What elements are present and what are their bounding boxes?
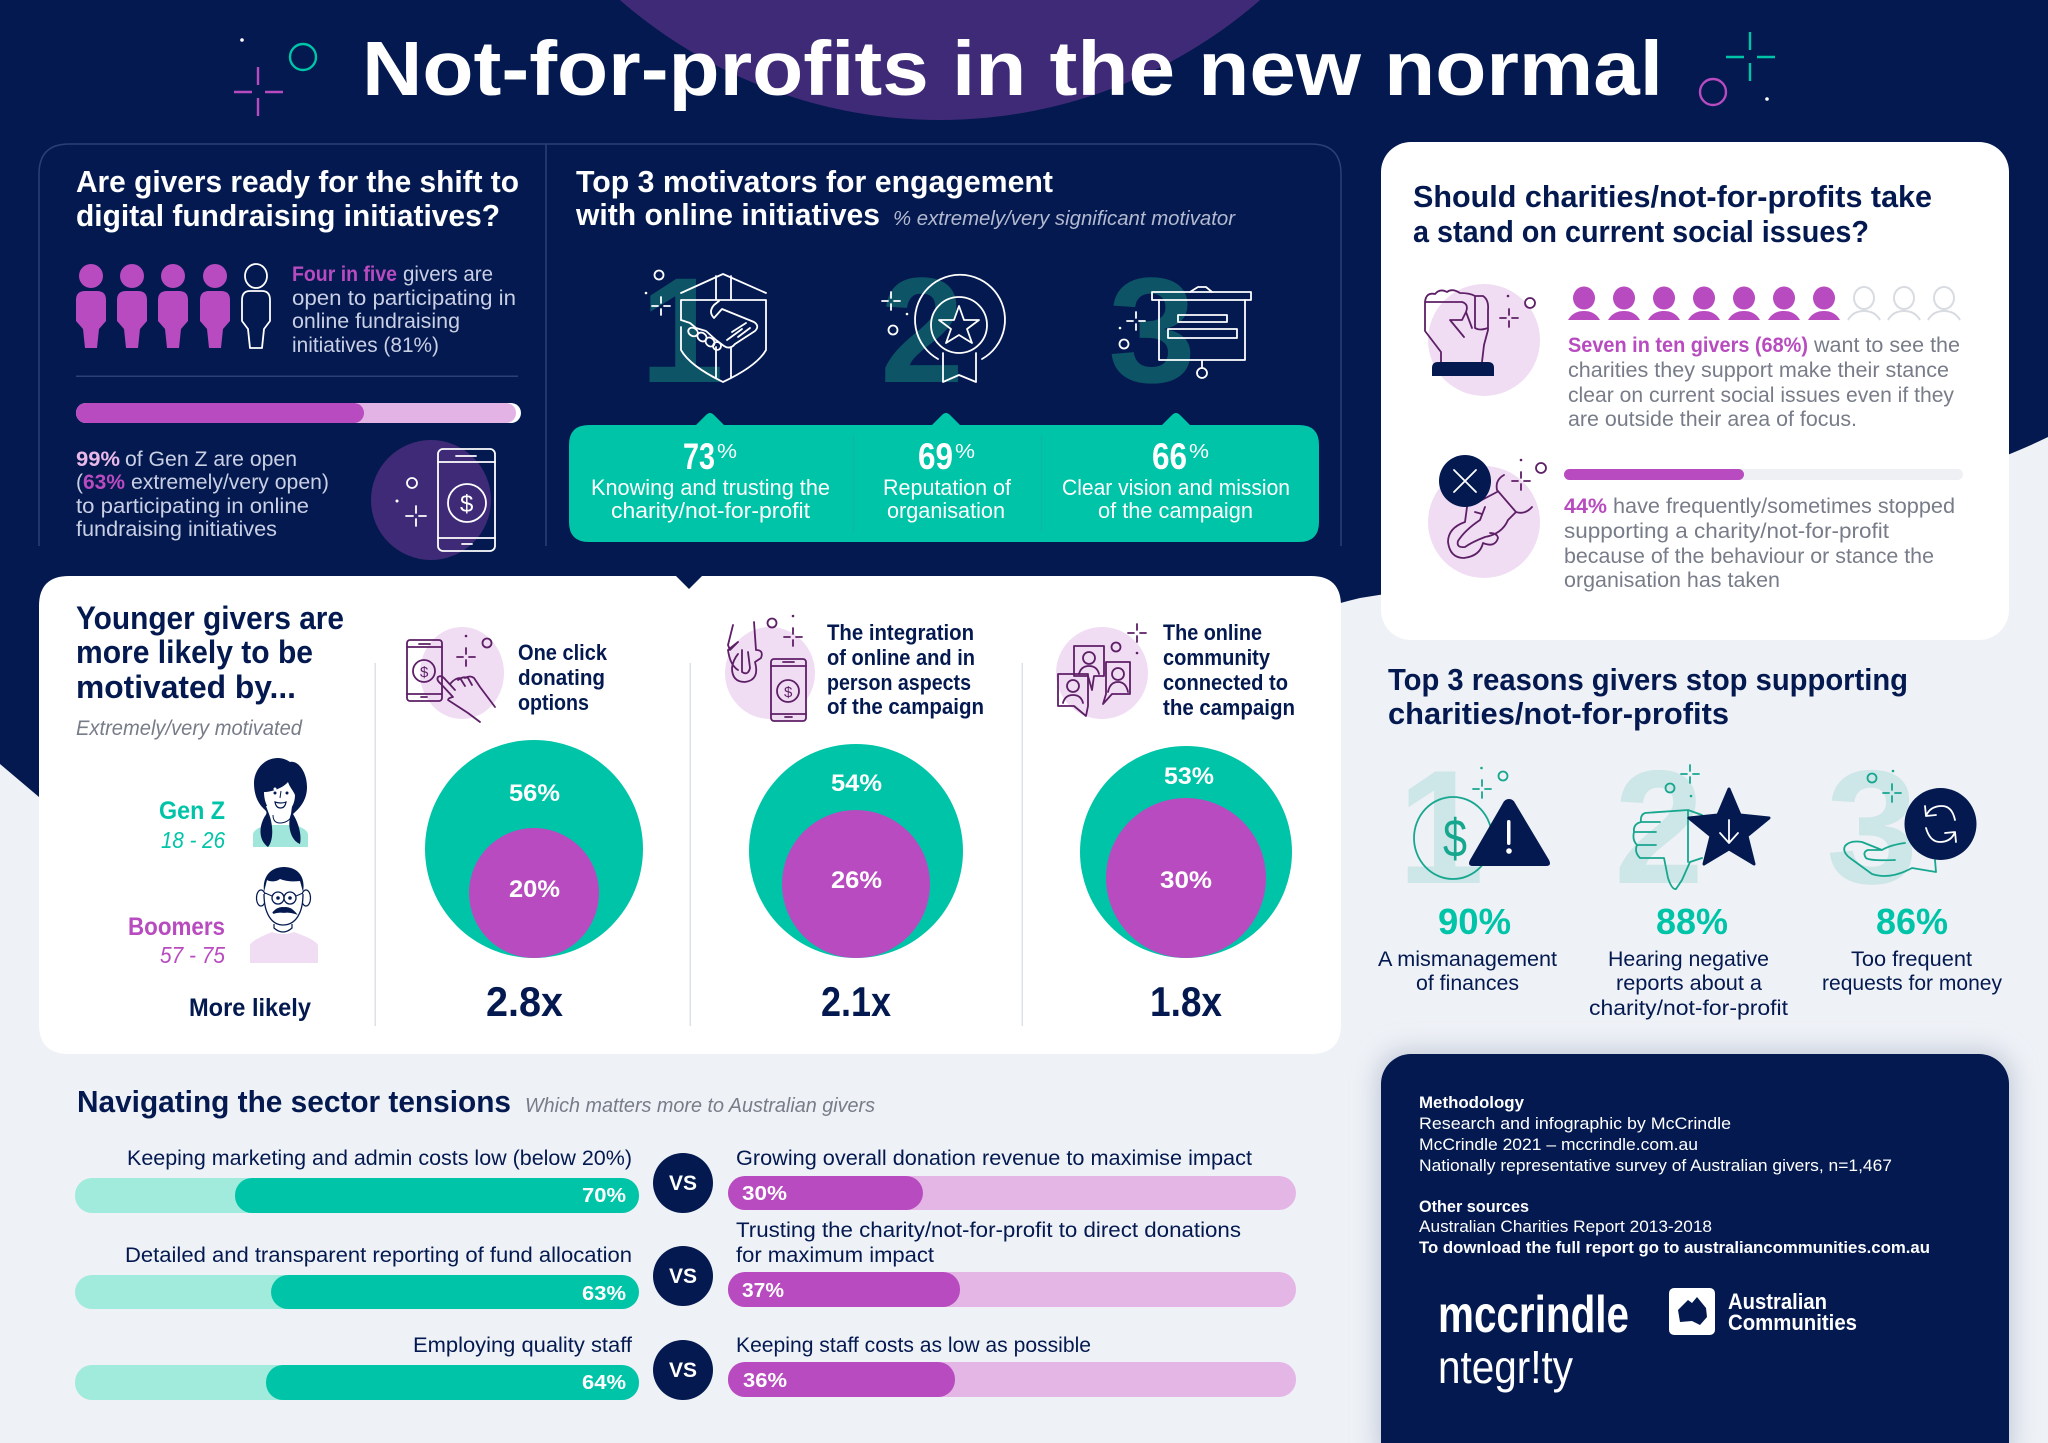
chart: 54 vs 26 percent: 54% — [831, 770, 882, 797]
row: reporting vs trusting the charity: Detailed and transparent reporting of fund allocation — [125, 1244, 632, 1267]
chart: 56 vs 20 percent: 20% — [509, 876, 560, 903]
icon: number 2 thumbs down star — [1614, 737, 1769, 918]
heading: Are givers ready for the shift to — [76, 164, 519, 199]
text: gen z openness: to participating in online — [76, 495, 309, 518]
stat: 73 percent: % — [717, 441, 737, 463]
subtitle: Extremely/very motivated — [76, 717, 303, 740]
stat: 73 percent: Knowing and trusting the — [591, 475, 830, 500]
stat: 66 percent — [1062, 436, 1290, 523]
text: gen z openness — [76, 448, 329, 541]
label — [827, 620, 984, 719]
text: gen z openness: 99% — [76, 448, 120, 471]
label: gen z: 18 - 26 — [161, 827, 225, 853]
panel: teal motivator statistics — [569, 413, 1319, 542]
text: 44 percent stopped: supporting a charity/not-for-profit — [1564, 520, 1889, 543]
stat: 66 percent: % — [1189, 441, 1209, 463]
text: gen z openness: fundraising initiatives — [76, 518, 277, 541]
heading — [1388, 662, 1908, 731]
label: of online and in — [827, 645, 975, 670]
text: other sources: To download the full report go to australiancommunities.com.au — [1419, 1239, 1930, 1257]
label: gen z — [159, 797, 225, 853]
logo: mccrindle: mccrindle — [1438, 1286, 1629, 1344]
multiplier: 2.8x — [486, 978, 564, 1025]
stat: 69 percent: 69 — [918, 436, 953, 477]
panel: are givers ready — [76, 164, 521, 560]
icon: number 2 award medal: 2 — [880, 246, 964, 414]
text: gen z openness: ( — [76, 471, 83, 494]
stat: 88 percent: charity/not-for-profit — [1589, 997, 1788, 1020]
icon: number 1 dollar warning: $ — [1443, 809, 1467, 869]
column: one click donating — [407, 627, 643, 1025]
heading — [575, 164, 1053, 232]
stat: 69 percent: Reputation of — [883, 475, 1012, 500]
stat: 73 percent — [591, 436, 830, 523]
panel: digital readiness and motivators outline — [39, 144, 1341, 546]
heading: Younger givers are — [76, 600, 344, 636]
text: four in five: open to participating in — [292, 287, 516, 310]
row: costs low vs donation revenue: Keeping marketing and admin costs low (below 20%) — [127, 1147, 632, 1170]
icon: ten people, seven filled — [1568, 286, 1960, 320]
icon: phone and hand — [407, 627, 504, 722]
label: boomers: Boomers — [128, 913, 225, 941]
icon: hand and phone: $ — [784, 684, 793, 701]
title: Not-for-profits in the new normal — [362, 26, 1663, 112]
text: seven in ten givers: Seven in ten givers (68%) — [1568, 334, 1808, 357]
multiplier: 2.1x — [821, 978, 892, 1025]
icon: number 1 shield handshake — [640, 246, 766, 414]
text: 44 percent stopped: have frequently/sometimes stopped — [1613, 495, 1955, 518]
stat: 90 percent: of finances — [1416, 972, 1519, 995]
icon: left title sparkles — [234, 38, 316, 116]
stat: 88 percent: reports about a — [1616, 972, 1762, 995]
row: costs low vs donation revenue: 30% — [742, 1183, 787, 1205]
stat: 90 percent — [1378, 901, 1557, 995]
chart: 53 vs 30 percent: 53% — [1164, 763, 1214, 790]
label: community — [1163, 645, 1271, 670]
stat: 88 percent: 88% — [1656, 901, 1728, 942]
stat: 90 percent: 90% — [1438, 901, 1511, 942]
stat: 88 percent: Hearing negative — [1608, 948, 1769, 971]
progress bar: 44 percent — [1564, 469, 1963, 480]
label: The integration — [827, 620, 974, 645]
stat: 86 percent — [1822, 901, 2002, 995]
text: four in five: Four in five — [292, 263, 397, 286]
text: gen z openness: extremely/very open) — [131, 471, 329, 494]
heading: Top 3 reasons givers stop supporting — [1388, 662, 1908, 697]
icon: number 3 hand with refresh: 3 — [1826, 737, 1918, 918]
text: other sources — [1419, 1198, 1930, 1257]
label: person aspects — [827, 670, 971, 695]
row: costs low vs donation revenue — [75, 1147, 1296, 1213]
chart: 54 vs 26 percent: 26% — [831, 867, 882, 894]
text: methodology — [1419, 1094, 1892, 1175]
panel: top 3 motivators — [569, 164, 1319, 542]
heading: Should charities/not-for-profits take — [1413, 179, 1932, 214]
icon: number 1 dollar warning: 1 — [1398, 737, 1484, 918]
icon: number 3 presentation board — [1108, 246, 1251, 414]
icon: raised fist — [1425, 284, 1540, 396]
row: costs low vs donation revenue: VS — [669, 1172, 697, 1195]
icon: phone and hand: $ — [420, 664, 429, 681]
heading: Navigating the sector tensions — [77, 1084, 511, 1119]
text: 44 percent stopped: 44% — [1564, 495, 1607, 518]
row: reporting vs trusting the charity: 37% — [742, 1280, 784, 1302]
heading — [76, 600, 344, 705]
text: methodology: Methodology — [1419, 1094, 1525, 1112]
stat: 90 percent: A mismanagement — [1378, 948, 1557, 971]
row: quality staff vs low staff costs: Keeping staff costs as low as possible — [736, 1334, 1091, 1357]
progress bar: 63 of 99 percent — [76, 403, 521, 423]
text: other sources: Other sources — [1419, 1198, 1529, 1216]
text: seven in ten givers: clear on current social issues even if they — [1568, 384, 1954, 407]
row: costs low vs donation revenue: Growing overall donation revenue to maximise impact — [736, 1147, 1252, 1170]
icon: chat profiles — [1056, 624, 1148, 719]
heading: with online initiatives — [575, 197, 880, 232]
stat: 86 percent: requests for money — [1822, 972, 2002, 995]
column: integration — [725, 615, 984, 1025]
label: gen z: Gen Z — [159, 797, 225, 825]
stat: 73 percent: charity/not-for-profit — [611, 498, 810, 523]
stat: 88 percent — [1589, 901, 1788, 1020]
column: online community — [1056, 620, 1295, 1025]
label — [518, 640, 608, 715]
chart: 54 vs 26 percent — [749, 744, 963, 958]
icon: number 2 thumbs down star: 2 — [1614, 737, 1704, 918]
heading: more likely to be — [76, 634, 313, 670]
text: gen z openness: 63% — [83, 471, 125, 494]
label: more likely: More likely — [189, 994, 311, 1022]
icon: number 1 shield handshake: 1 — [640, 246, 724, 414]
icon: number 1 dollar warning — [1398, 737, 1550, 918]
stat: 86 percent: Too frequent — [1851, 948, 1972, 971]
row: reporting vs trusting the charity: 63% — [582, 1283, 626, 1305]
icon: hand and phone — [725, 615, 815, 721]
text: seven in ten givers: charities they support make their stance — [1568, 359, 1949, 382]
row: quality staff vs low staff costs: 36% — [743, 1370, 787, 1392]
logo: integrity: ntegr!ty — [1438, 1341, 1573, 1393]
text: 44 percent stopped: organisation has taken — [1564, 569, 1780, 592]
label: options — [518, 690, 589, 715]
stat: 66 percent: 66 — [1152, 436, 1187, 477]
multiplier: 1.8x — [1150, 978, 1223, 1025]
text: other sources: Australian Charities Report 2013-2018 — [1419, 1218, 1712, 1236]
heading: digital fundraising initiatives? — [76, 198, 500, 233]
text: gen z openness: of Gen Z are open — [125, 448, 297, 471]
panel: sector tensions — [75, 1084, 1296, 1400]
text: seven in ten givers — [1568, 334, 1960, 431]
row: quality staff vs low staff costs: 64% — [582, 1372, 626, 1394]
chart: 56 vs 20 percent: 56% — [509, 780, 560, 807]
heading: charities/not-for-profits — [1388, 696, 1729, 731]
stat: 66 percent: of the campaign — [1098, 498, 1253, 523]
text: seven in ten givers: are outside their area of focus. — [1568, 408, 1857, 431]
logo: australian communities: Australian — [1728, 1289, 1827, 1314]
text: 44 percent stopped: because of the behaviour or stance the — [1564, 545, 1934, 568]
label: One click — [518, 640, 608, 665]
icon: right title sparkles — [1700, 32, 1775, 105]
row: costs low vs donation revenue: 70% — [582, 1185, 626, 1207]
icon: number 2 award medal — [880, 246, 1005, 414]
heading — [1413, 179, 1932, 249]
text: four in five — [292, 263, 516, 357]
stat: 86 percent: 86% — [1876, 901, 1948, 942]
logo: australian communities — [1669, 1288, 1857, 1335]
stat: 69 percent: organisation — [887, 498, 1005, 523]
text: seven in ten givers: want to see the — [1813, 334, 1960, 357]
heading: Top 3 motivators for engagement — [576, 164, 1053, 199]
icon: number 3 presentation board: 3 — [1108, 246, 1196, 414]
text: 44 percent stopped — [1564, 495, 1955, 592]
text: methodology: Nationally representative survey of Australian givers, n=1,467 — [1419, 1157, 1892, 1175]
label: connected to — [1163, 670, 1288, 695]
stat: 73 percent: 73 — [683, 436, 715, 477]
text: methodology: McCrindle 2021 – mccrindle.com.au — [1419, 1136, 1698, 1154]
chart: 53 vs 30 percent: 30% — [1160, 867, 1212, 894]
panel: younger givers — [39, 576, 1341, 1054]
panel: top 3 reasons — [1378, 662, 2002, 1020]
label: boomers — [128, 913, 225, 968]
subtitle: % extremely/very significant motivator — [893, 208, 1236, 230]
subtitle: Which matters more to Australian givers — [525, 1095, 875, 1117]
text: four in five: givers are — [403, 263, 493, 286]
icon: hand releasing heart with cross badge — [1428, 455, 1546, 578]
panel: methodology footer — [1377, 1050, 2013, 1443]
icon: five people, four filled — [76, 264, 270, 348]
row: reporting vs trusting the charity: for maximum impact — [736, 1244, 934, 1267]
row: reporting vs trusting the charity: VS — [669, 1265, 697, 1288]
icon: phone with dollar: $ — [460, 491, 473, 518]
row: reporting vs trusting the charity — [75, 1219, 1296, 1309]
stat: 69 percent — [883, 436, 1012, 523]
stat: 66 percent: Clear vision and mission — [1062, 475, 1290, 500]
logo: australian communities: Communities — [1728, 1310, 1857, 1335]
icon: phone with dollar — [371, 440, 495, 560]
text: four in five: initiatives (81%) — [292, 334, 439, 357]
row: reporting vs trusting the charity: Trusting the charity/not-for-profit to direct donations — [736, 1219, 1241, 1242]
label: of the campaign — [827, 694, 984, 719]
chart: 56 vs 20 percent — [425, 740, 643, 958]
stat: 69 percent: % — [955, 441, 975, 463]
heading: motivated by... — [76, 669, 296, 705]
label — [1163, 620, 1295, 720]
row: quality staff vs low staff costs: VS — [669, 1359, 697, 1382]
chart: 53 vs 30 percent — [1080, 746, 1292, 958]
label: the campaign — [1163, 695, 1295, 720]
icon: boomer avatar — [250, 867, 318, 963]
text: methodology: Research and infographic by McCrindle — [1419, 1115, 1731, 1133]
panel: social issues — [1381, 142, 2009, 640]
row: quality staff vs low staff costs — [75, 1334, 1296, 1400]
label: donating — [518, 665, 605, 690]
label: The online — [1163, 620, 1262, 645]
heading: a stand on current social issues? — [1413, 214, 1869, 249]
icon: number 3 hand with refresh — [1826, 737, 1976, 918]
label: boomers: 57 - 75 — [160, 942, 225, 968]
row: quality staff vs low staff costs: Employing quality staff — [413, 1334, 632, 1357]
icon: gen z avatar — [253, 758, 308, 847]
text: four in five: online fundraising — [292, 310, 460, 333]
heading — [76, 164, 519, 233]
